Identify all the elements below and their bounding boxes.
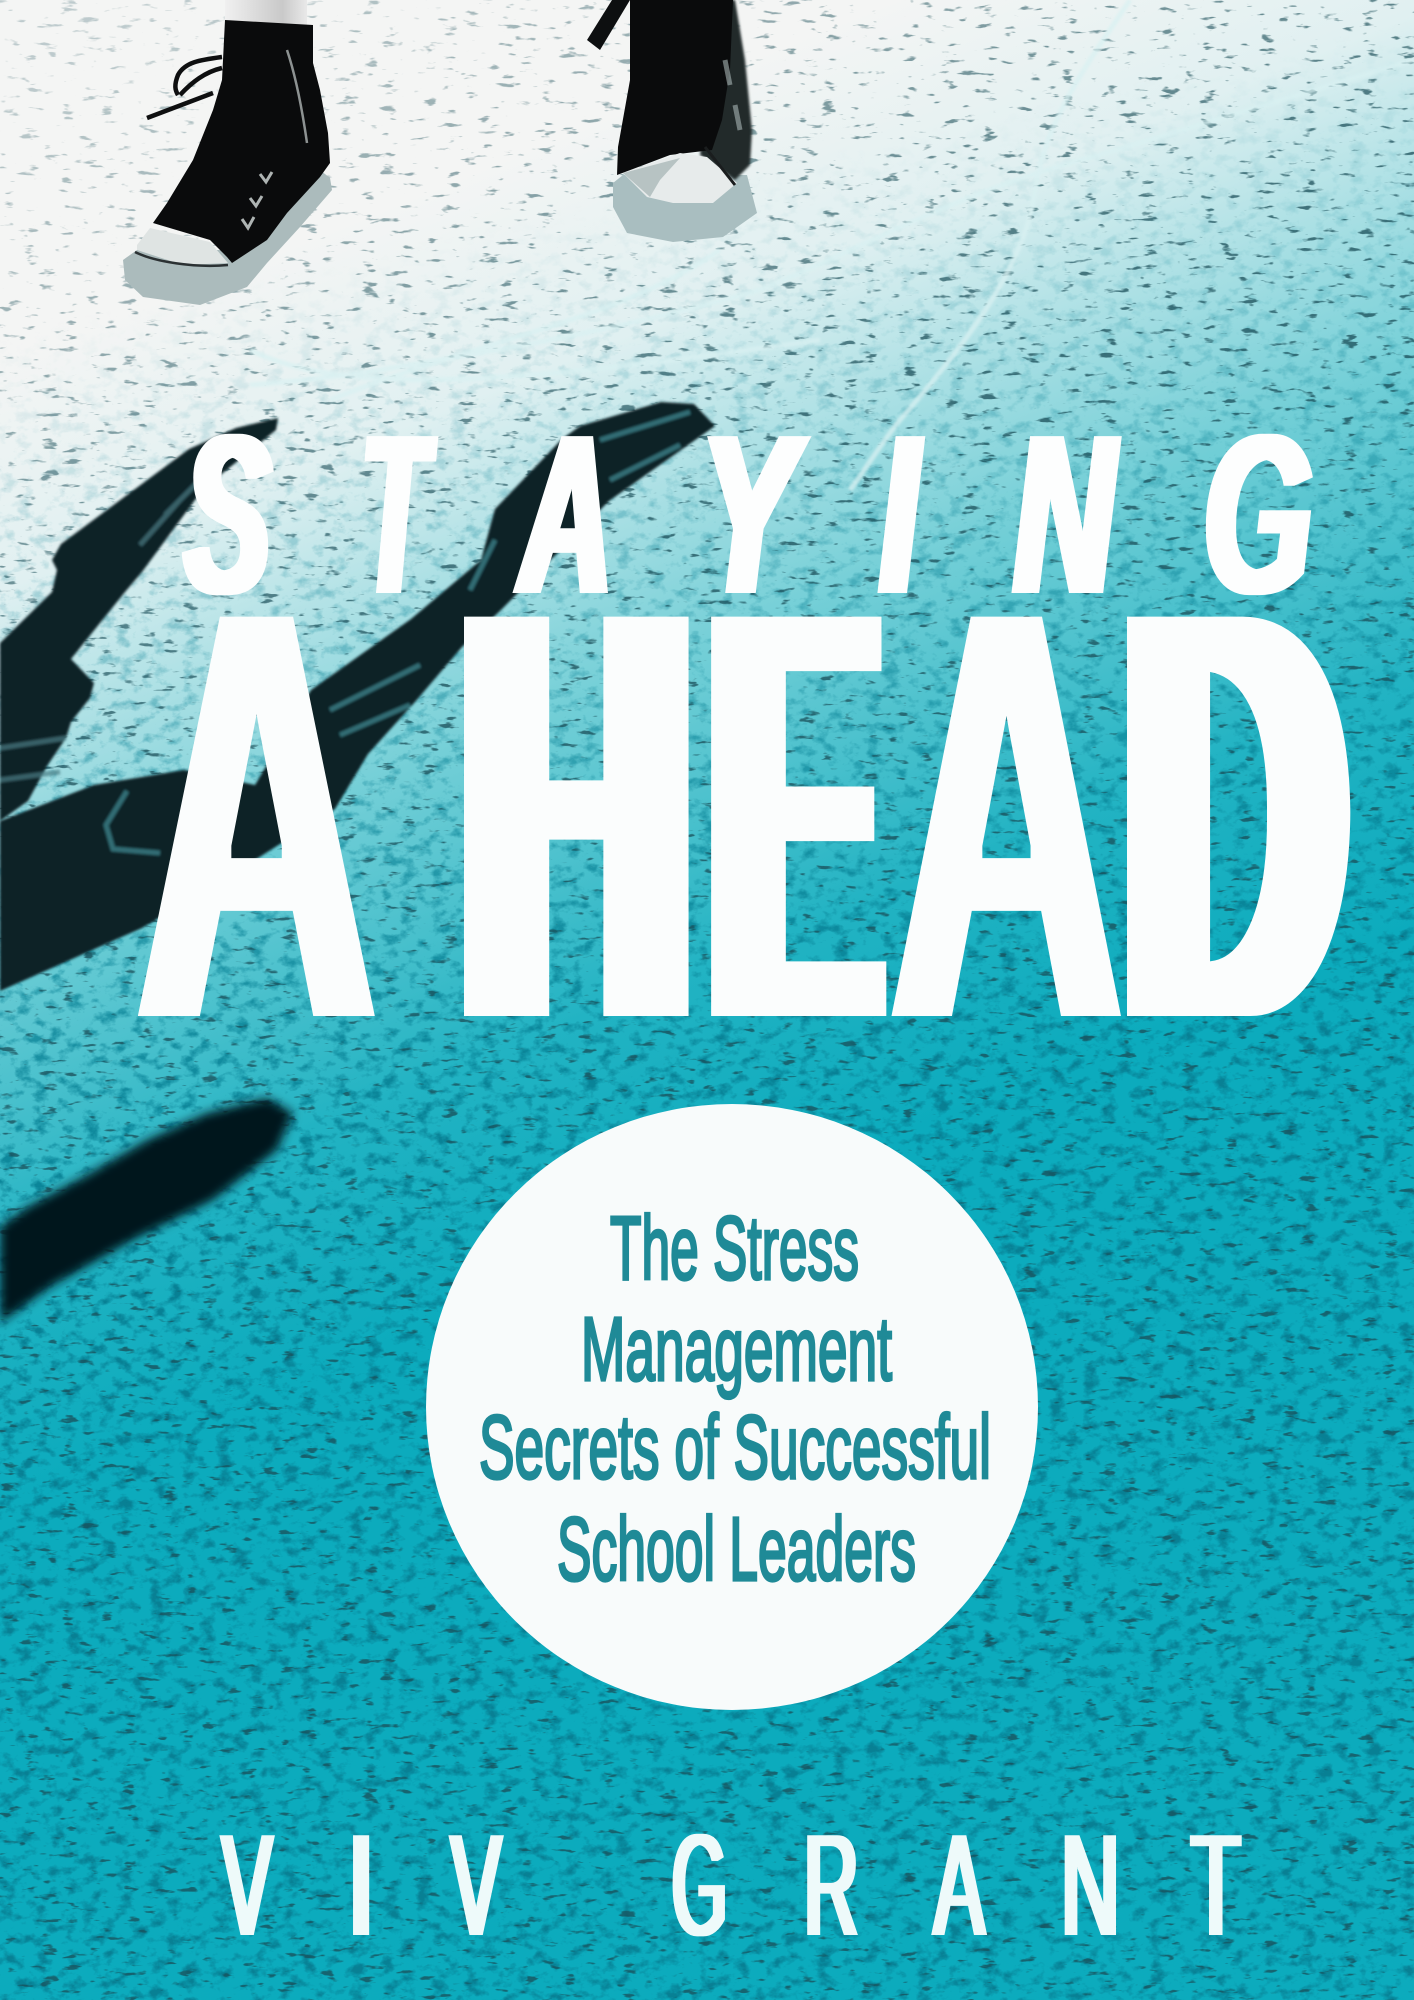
subtitle text: Management <box>581 1300 892 1400</box>
title line: STAYING: A <box>517 388 612 642</box>
title line: STAYING: Y <box>700 388 807 642</box>
title line: AHEAD: D <box>1127 482 1343 1150</box>
author name: G <box>672 1805 727 1967</box>
title line: STAYING: G <box>1204 388 1312 643</box>
subtitle text: The Stress <box>610 1199 859 1299</box>
subtitle text: Secrets of Successful <box>479 1398 991 1498</box>
chalk lines on ground <box>250 0 1414 490</box>
author name <box>222 1804 1241 1967</box>
title line: AHEAD: E <box>715 480 876 1149</box>
author name: R <box>804 1805 858 1966</box>
subtitle circle <box>426 1104 1038 1710</box>
author name: T <box>1191 1804 1241 1966</box>
title line: STAYING: T <box>362 386 434 642</box>
author name: I <box>346 1805 376 1967</box>
title line: STAYING: N <box>1014 388 1117 643</box>
title line: AHEAD: A <box>889 482 1124 1150</box>
title line: STAYING: I <box>880 387 921 642</box>
title line: AHEAD <box>135 480 1343 1150</box>
subtitle text: School Leaders <box>557 1500 916 1600</box>
left shoe <box>123 0 332 305</box>
shadow: lower streak <box>0 1098 293 1323</box>
shadow: right leg <box>0 402 715 991</box>
author name: V <box>222 1805 272 1966</box>
title line: STAYING: S <box>185 388 270 642</box>
title line: AHEAD: H <box>463 482 690 1150</box>
right shoe <box>587 0 757 242</box>
author name: A <box>934 1805 984 1966</box>
title line: STAYING <box>185 386 1312 643</box>
author name: V <box>451 1805 501 1966</box>
title line: AHEAD: A <box>135 481 378 1149</box>
shadow: left leg <box>0 418 278 821</box>
subtitle text <box>479 1199 991 1600</box>
author name: N <box>1061 1804 1120 1966</box>
